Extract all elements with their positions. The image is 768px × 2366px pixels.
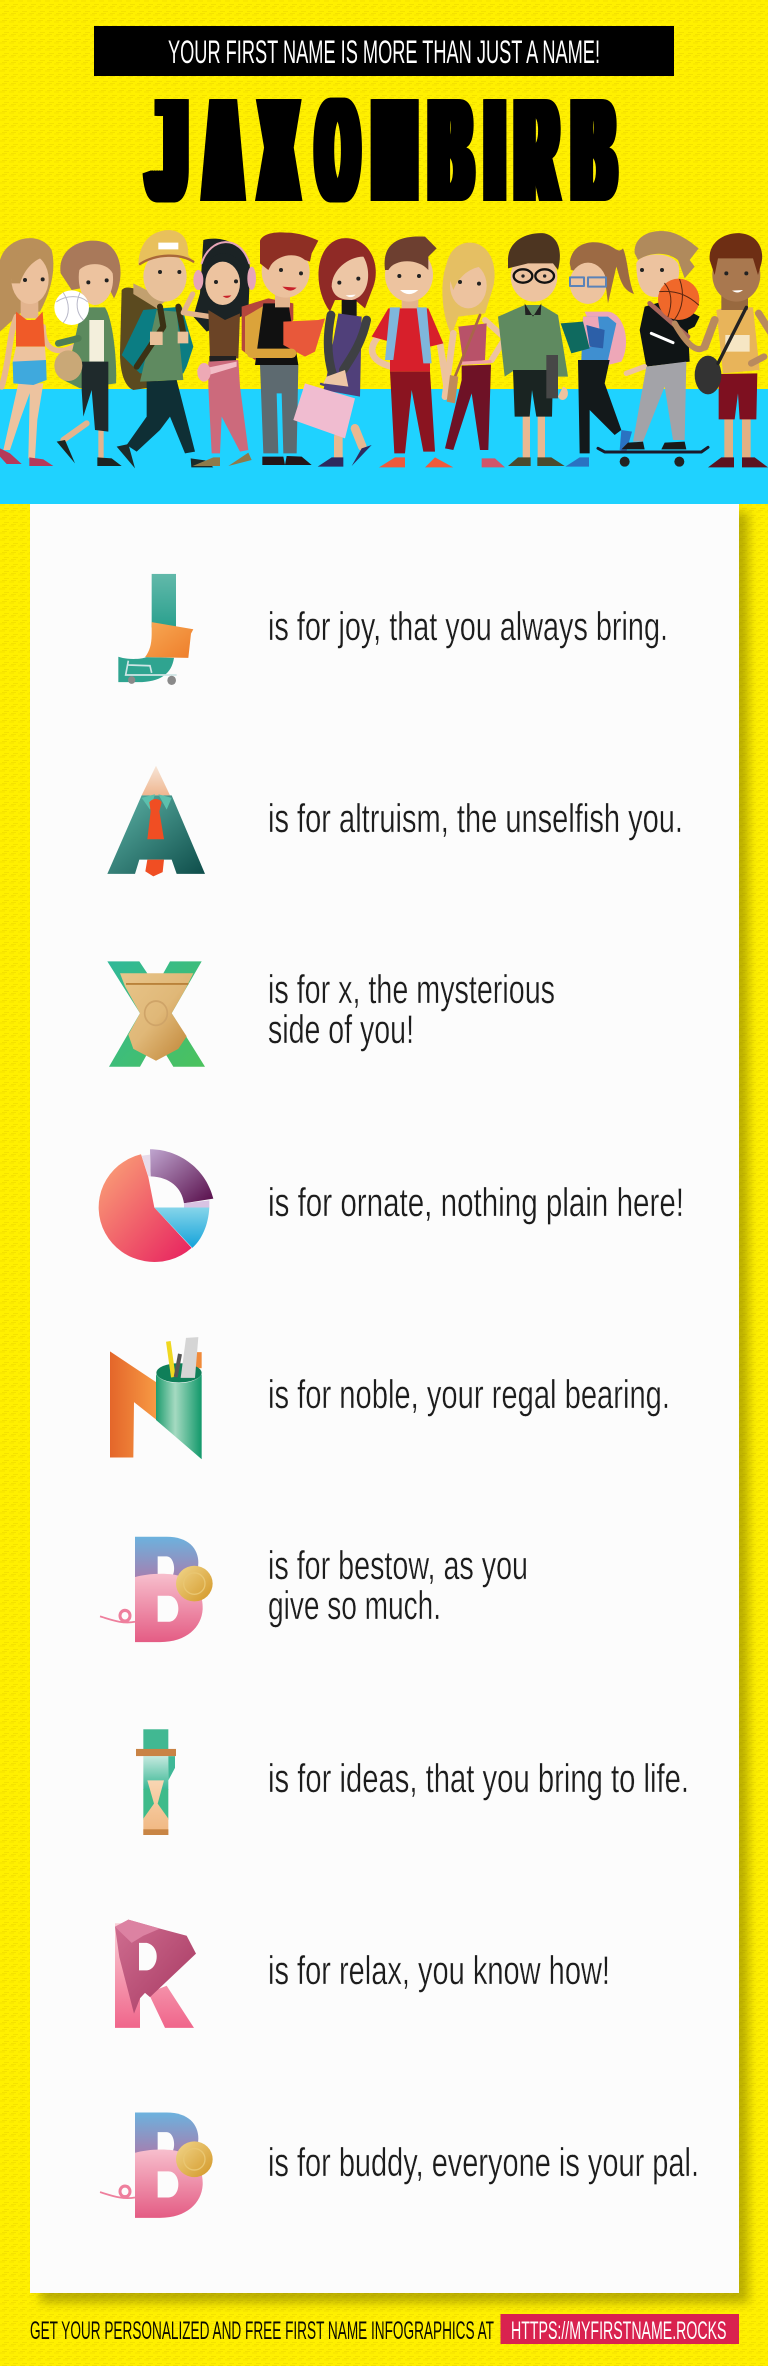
row 3: text: is for x, the mysterious bbox=[268, 968, 555, 1012]
boy with red shirt bbox=[372, 236, 453, 467]
row 5: letter N icon bbox=[110, 1337, 202, 1459]
title: name in heavy block letters: B bbox=[574, 68, 613, 233]
row 6: letter B piggy icon bbox=[100, 1537, 213, 1642]
panel: white content card bbox=[30, 504, 749, 2303]
curly haired boy bbox=[658, 233, 768, 467]
boy with basketball on skateboard bbox=[598, 231, 708, 467]
title: name in heavy block letters: N bbox=[380, 68, 410, 233]
row 6: text: is for bestow, as you bbox=[268, 1544, 528, 1588]
blue floor band bbox=[0, 389, 768, 504]
row 3: letter X icon bbox=[107, 961, 205, 1067]
row 3: text bbox=[268, 968, 555, 1052]
row 8: letter R gem icon bbox=[115, 1920, 196, 2028]
title: name in heavy block letters: O bbox=[318, 68, 357, 233]
title: name in heavy block letters bbox=[142, 68, 619, 233]
girl in orange top bbox=[0, 238, 77, 466]
girl with ponytail bbox=[561, 242, 634, 467]
row 6: text: give so much. bbox=[268, 1584, 441, 1628]
row 8: text: is for relax, you know how! bbox=[268, 1949, 610, 1993]
title: name in heavy block letters: B bbox=[431, 68, 470, 233]
person 9 to 12 bbox=[498, 231, 768, 467]
girl with pink bag bbox=[293, 238, 376, 467]
row 4: letter O icon bbox=[99, 1149, 213, 1262]
illustration: group of thirteen students bbox=[0, 230, 768, 468]
girl with headphones bbox=[183, 239, 256, 466]
title: name in heavy block letters: A bbox=[210, 68, 236, 233]
boy with book bbox=[242, 232, 325, 465]
person 1 to 4 bbox=[0, 230, 256, 468]
title: name in heavy block letters: J bbox=[150, 68, 184, 233]
title: name in heavy block letters: X bbox=[266, 68, 292, 233]
title: name in heavy block letters: I bbox=[487, 68, 502, 233]
header banner bbox=[94, 26, 674, 76]
boy with cap and backpack bbox=[117, 230, 213, 468]
title: name in heavy block letters: R bbox=[516, 68, 556, 233]
row 2: letter A icon bbox=[107, 766, 205, 876]
blonde girl bbox=[442, 243, 505, 467]
person 5 to 8 bbox=[242, 232, 505, 467]
row 9: letter B piggy icon bbox=[100, 2112, 213, 2218]
row 7: letter I hourglass icon bbox=[136, 1729, 176, 1835]
row 3: text: side of you! bbox=[268, 1008, 414, 1052]
row 1: letter J icon bbox=[118, 574, 193, 685]
girl with volleyball bbox=[54, 241, 122, 466]
boy with glasses bbox=[498, 233, 568, 466]
row 6: text bbox=[268, 1544, 528, 1628]
